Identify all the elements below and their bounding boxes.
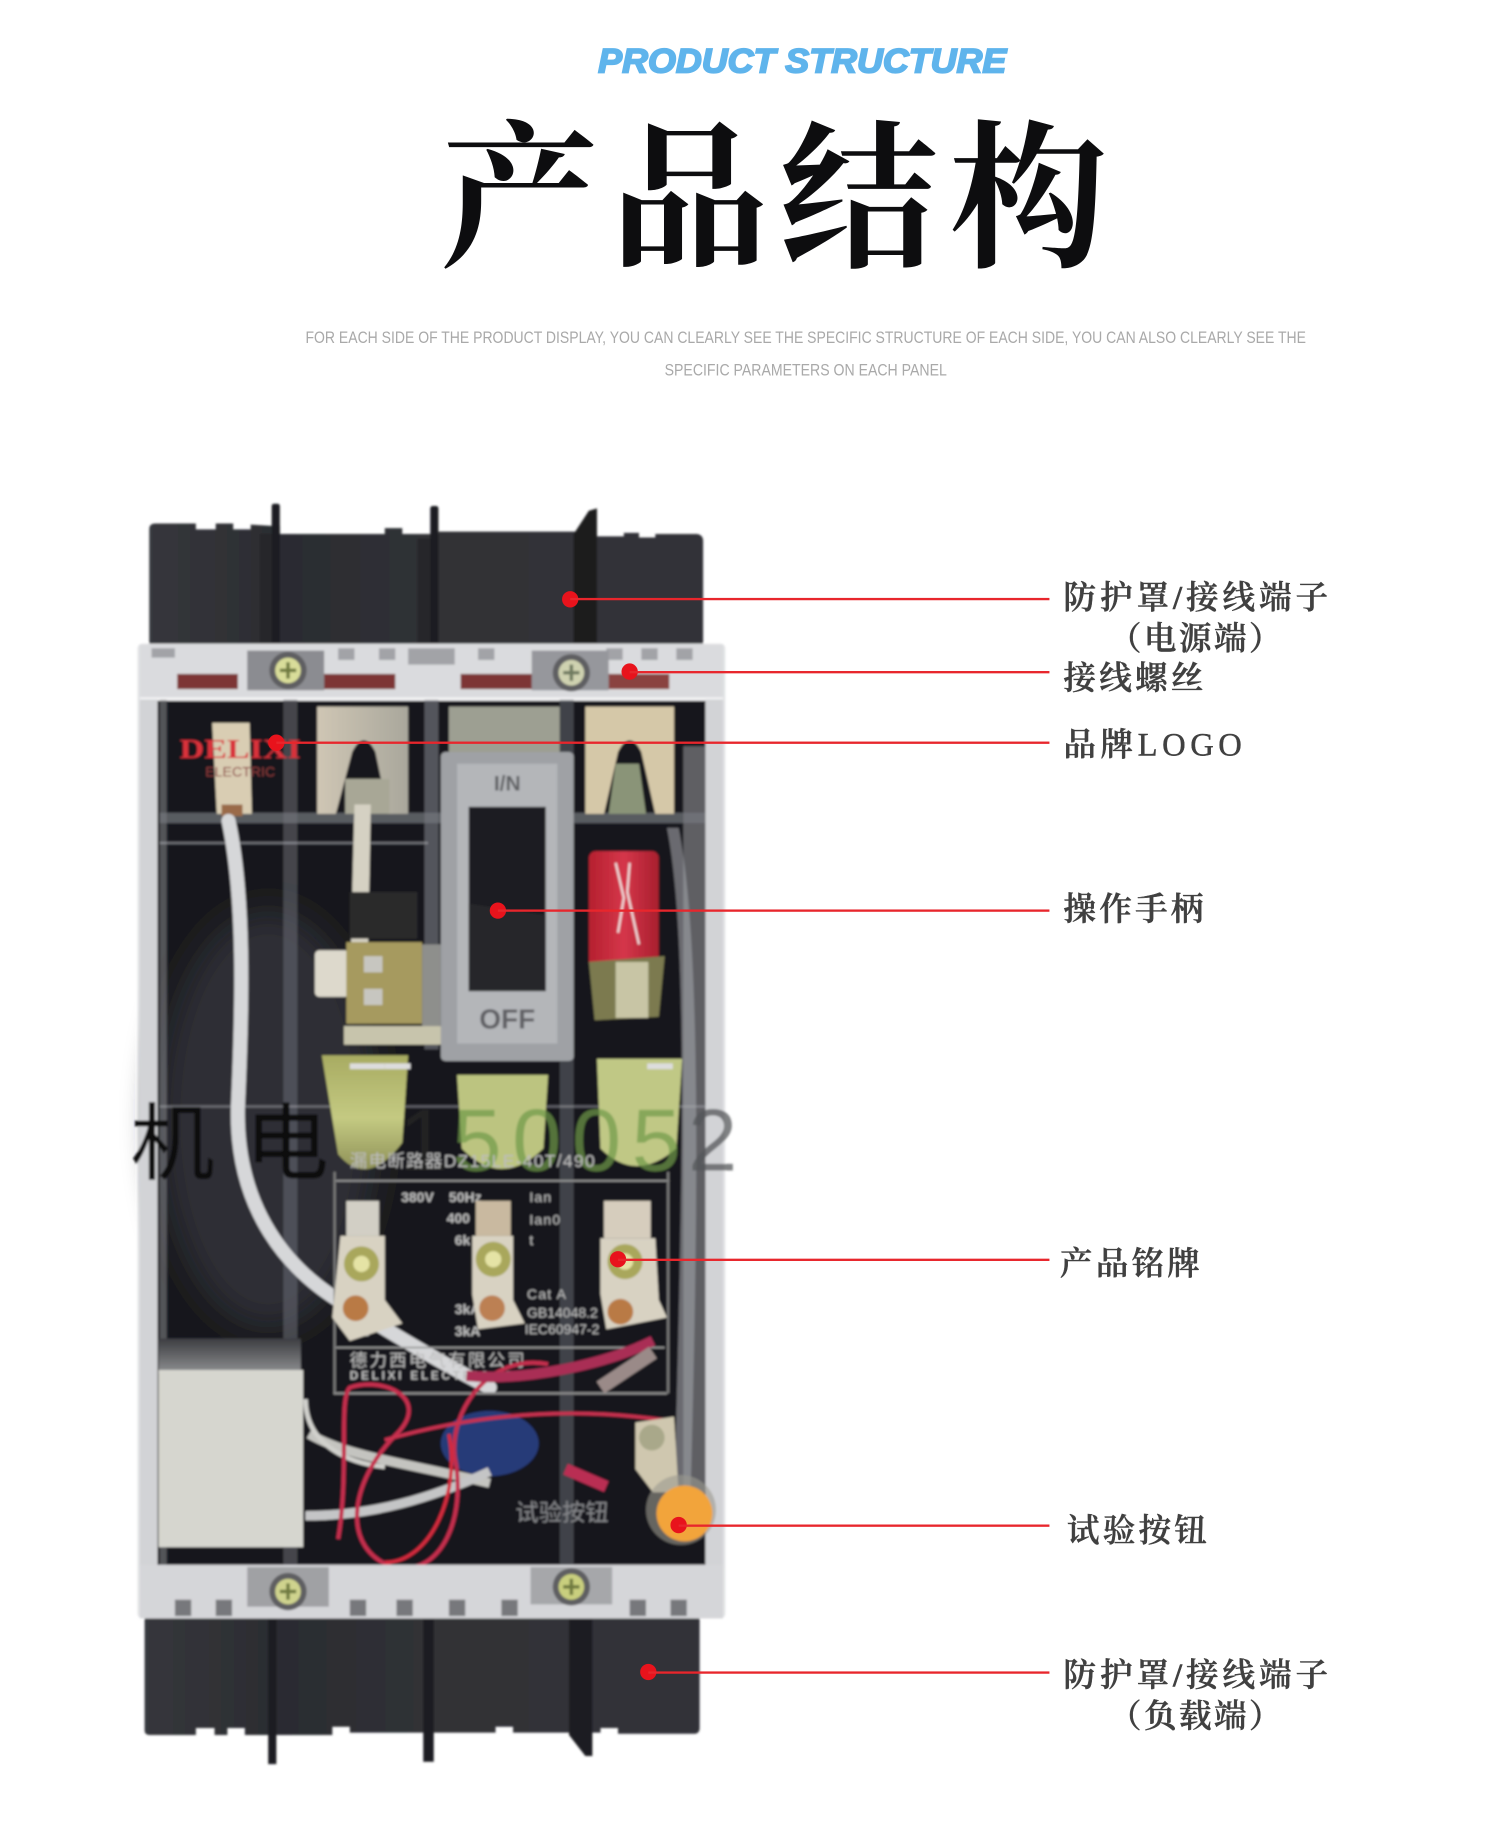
nameplate: DELIXI ELECTRIC LTD [350, 1369, 525, 1382]
callout: nameplate: 产品铭牌 [1060, 1245, 1200, 1282]
nameplate: 50Hz [449, 1189, 482, 1205]
white wire [229, 821, 490, 1387]
screws [269, 652, 590, 1610]
operating handle [441, 752, 574, 1061]
callout: brand logo: 品牌LOGO [1063, 727, 1242, 764]
trip mechanism [315, 805, 449, 1045]
bottom rim [140, 1565, 723, 1618]
nameplate: 3kA [455, 1323, 480, 1339]
nameplate: GB14048.2 [527, 1305, 598, 1321]
brand logo on body: DELIXI [180, 734, 301, 765]
nameplate: t [529, 1232, 533, 1248]
nameplate: Ics [352, 1323, 370, 1339]
screw terminals [332, 1201, 667, 1341]
operating handle: OFF [479, 1003, 535, 1034]
callout: protective cover, line side [562, 580, 1328, 657]
N terminal [212, 723, 252, 814]
callout: wiring screw: 接线螺丝 [1063, 660, 1203, 697]
description text [306, 329, 1306, 379]
nameplate: 3kA [455, 1301, 480, 1317]
description text: SPECIFIC PARAMETERS ON EACH PANEL [665, 361, 947, 379]
operating handle: I/N [494, 773, 521, 796]
product photo: circuit breaker [131, 504, 737, 1764]
transparent breaker body [138, 644, 725, 1618]
brand logo on body: ELECTRIC [205, 764, 275, 780]
callout: brand logo [268, 727, 1242, 764]
watermark: 机电 [131, 1097, 329, 1191]
nameplate: 德力西电气有限公司 [350, 1351, 525, 1371]
yellow-green terminals [322, 1055, 682, 1169]
callout: protective cover, load side: （负载端） [1109, 1698, 1281, 1735]
nameplate: Ian0 [529, 1211, 561, 1227]
callout: test button [670, 1512, 1207, 1549]
description text: FOR EACH SIDE OF THE PRODUCT DISPLAY, YOU CAN CLEARLY SEE THE SPECIFIC STRUCTURE OF EACH SIDE, YOU CAN ALSO CLEARLY SEE THE [306, 329, 1306, 347]
nameplate [333, 1151, 669, 1394]
callout: wiring screw [622, 660, 1203, 697]
test button: 试验按钮 [515, 1499, 609, 1525]
nameplate: Ian [529, 1189, 552, 1205]
nameplate: 6k [455, 1232, 471, 1248]
callout: protective cover, line side: （电源端） [1109, 620, 1281, 657]
subtitle: PRODUCT STRUCTURE: PRODUCT STRUCTURE [598, 42, 1008, 80]
watermark: 1 [399, 1091, 448, 1190]
wiring [306, 1341, 665, 1569]
callout: nameplate [610, 1245, 1200, 1282]
callout: protective cover, load side: 防护罩/接线端子 [1063, 1657, 1328, 1694]
watermark [131, 1091, 737, 1191]
callout: operating handle: 操作手柄 [1063, 891, 1203, 928]
red coil [589, 851, 665, 1020]
fork terminals [317, 707, 674, 814]
watermark: 5005 [452, 1091, 681, 1190]
callout: operating handle [490, 891, 1203, 928]
test button [515, 1417, 716, 1545]
callout: test button: 试验按钮 [1067, 1512, 1207, 1549]
top protective cover [149, 504, 703, 653]
nameplate: IEC60947-2 [525, 1321, 600, 1337]
callout: protective cover, line side: 防护罩/接线端子 [1063, 580, 1328, 617]
nameplate: 380V [401, 1189, 434, 1205]
brand logo on body [180, 734, 301, 780]
bottom protective cover [145, 1615, 700, 1764]
relay box [159, 1339, 303, 1547]
title: 产品结构 [441, 114, 1108, 289]
nameplate: 漏电断路器DZ15LE-40T/490 [350, 1151, 595, 1171]
top rim [140, 645, 723, 701]
watermark: 2 [688, 1091, 737, 1190]
nameplate: Cat A [527, 1286, 567, 1302]
translucent ribs [283, 700, 297, 1568]
nameplate: 400 [447, 1210, 470, 1226]
callout: protective cover, load side [640, 1657, 1328, 1735]
